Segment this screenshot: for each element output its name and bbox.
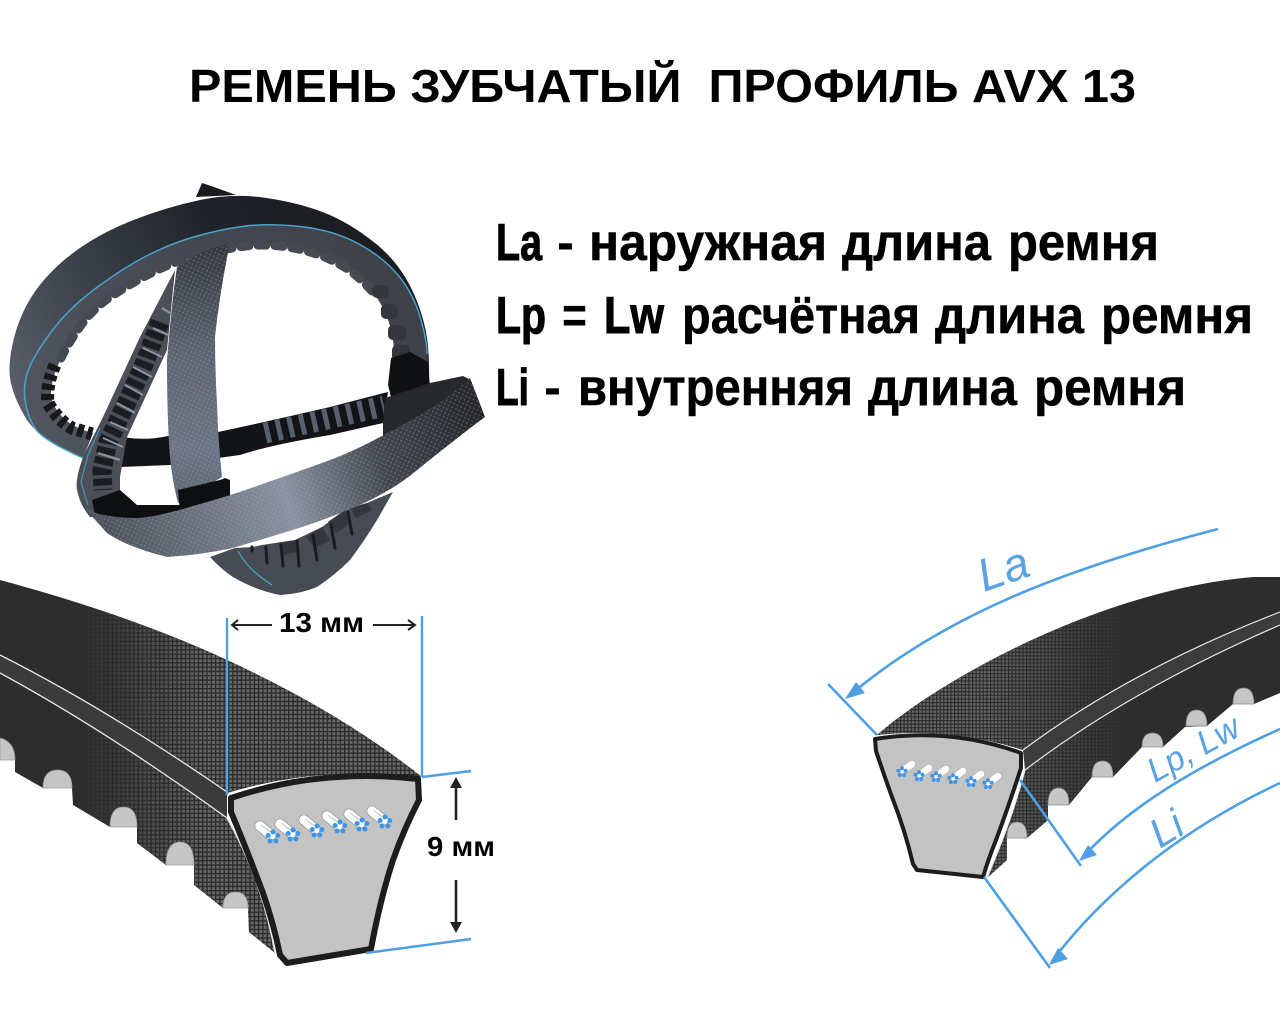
label: 13 mm: 13 мм [279, 607, 364, 638]
front belt texture [80, 378, 485, 557]
white edge lines [0, 655, 275, 953]
width arrows [232, 620, 415, 630]
Li dimension [984, 783, 1280, 968]
legend line: Lp = Lw: Lp [496, 287, 546, 345]
lower loop blue cord [238, 551, 272, 585]
Lp, Lw dimension [1020, 707, 1280, 866]
big loop lower dark teeth [48, 365, 92, 434]
belt upper face texture [100, 611, 421, 793]
height arrows [450, 777, 462, 933]
vertical strand texture [167, 243, 230, 503]
lower side texture [100, 734, 274, 952]
legend line: Li: внутренняя [578, 359, 853, 417]
legend line: Li: ремня [1034, 359, 1186, 417]
cords [896, 764, 998, 789]
title: РЕМЕНЬ ЗУБЧАТЫЙ ПРОФИЛЬ AVX 13 [189, 60, 1136, 112]
cords [260, 810, 392, 844]
black section under vertical strand [178, 478, 230, 512]
La dimension [828, 529, 1218, 735]
belt upper face texture [877, 610, 1108, 750]
big loop inner side [24, 225, 428, 458]
legend line: Lp = Lw: = [562, 287, 587, 345]
belt side band [1023, 612, 1280, 770]
big loop band [9, 196, 429, 458]
toothed diagonal strand [77, 270, 180, 517]
black base under the diagonal strand [92, 490, 180, 523]
legend: belt length definitions [496, 214, 1253, 417]
Lp, Lw label: Lp, Lw [1140, 707, 1249, 790]
junction at the right end of the front belt [383, 376, 471, 437]
cross-section [231, 776, 419, 963]
legend line: Lp = Lw: расчётная [682, 287, 920, 345]
Li label: Li [1141, 800, 1194, 857]
black right part of the loop [388, 352, 430, 400]
cross-section [875, 735, 1021, 877]
lower loop teeth [252, 512, 352, 566]
belt upper face [877, 577, 1280, 750]
legend line: La: La [496, 214, 543, 272]
legend line: Li: Li [496, 359, 529, 417]
diagonal strand dark teeth [102, 322, 160, 490]
height dimension lines [366, 771, 471, 953]
legend line: Lp = Lw: длина [935, 287, 1085, 345]
right knobs of the loop teeth [372, 285, 410, 361]
tooth highlights on horizontal strand [265, 406, 384, 433]
lower side texture [988, 715, 1108, 876]
label: 9 mm: 9 мм [427, 831, 495, 862]
toothed lower side [0, 673, 275, 953]
lower loop [210, 492, 393, 595]
legend line: La: ремня [1008, 214, 1159, 272]
photo: knotted toothed belt [9, 183, 485, 595]
left belt section: 13 x 9 mm [0, 580, 495, 963]
black horizontal strand [120, 392, 388, 467]
width dimension lines [227, 616, 422, 795]
legend line: Lp = Lw [496, 287, 1253, 345]
lower loop tooth blocks [278, 503, 372, 555]
La label: La [970, 536, 1036, 601]
right belt section with length markings [828, 529, 1280, 968]
front belt band [80, 378, 485, 557]
legend line: Li [496, 359, 1186, 417]
teeth gaps [0, 738, 248, 908]
diagonal strand light stripes [98, 308, 170, 460]
toothed lower side [987, 625, 1280, 878]
big loop scalloped teeth [61, 245, 372, 358]
legend line: Li: - [544, 359, 561, 417]
belt upper face [0, 580, 422, 793]
blue cord line [24, 225, 427, 458]
vertical strand [167, 243, 230, 503]
legend line: Lp = Lw: Lw [604, 287, 664, 345]
belt side band [0, 655, 227, 818]
diagonal strand blue cord [81, 428, 100, 505]
legend line: La: длина [842, 214, 992, 272]
white edge lines [987, 612, 1280, 878]
legend line: La [496, 214, 1159, 272]
legend line: La: наружная [589, 214, 827, 272]
legend line: La: - [557, 214, 574, 272]
teeth gaps [1007, 688, 1254, 838]
legend line: Lp = Lw: ремня [1101, 287, 1253, 345]
top tab of the rear belt strand [196, 183, 236, 197]
legend line: Li: длина [868, 359, 1018, 417]
